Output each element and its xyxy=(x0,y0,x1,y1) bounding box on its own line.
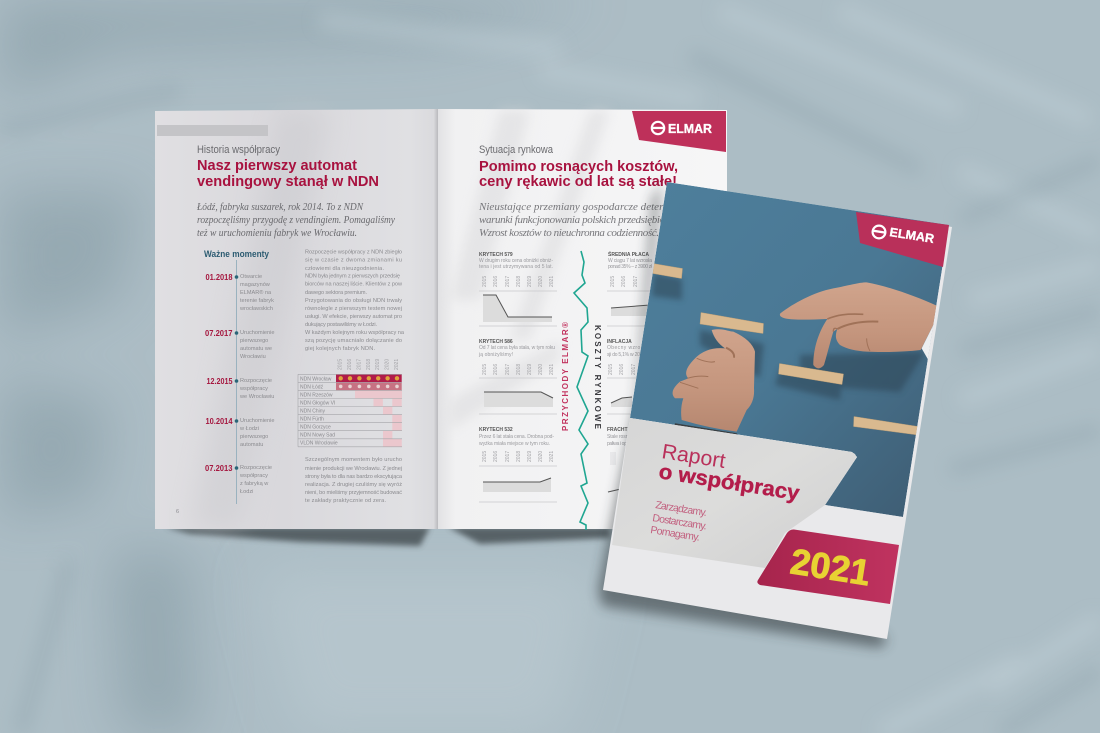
icon: lower hand xyxy=(672,329,755,442)
milestone descriptions: ELMAR® na xyxy=(240,289,272,296)
milestone descriptions: wrocławskich xyxy=(239,306,273,312)
panel: report cover xyxy=(603,182,952,639)
row labels: NDN Wrocław xyxy=(300,376,332,382)
title: o współpracy xyxy=(657,460,801,505)
closing paragraph: realizacja. Z drugiej czuliśmy się wyróż xyxy=(305,482,402,488)
chart: KRYTECH 586: 2020 xyxy=(538,364,544,375)
milestone descriptions: we Wrocławiu xyxy=(239,394,274,400)
year header: 2017 xyxy=(356,359,362,370)
milestone descriptions: Wrocławiu xyxy=(240,354,266,360)
timeline xyxy=(205,260,275,504)
vertical label: market costs: KOSZTY RYNKOWE xyxy=(593,325,602,430)
chart: average salary: ŚREDNIA PŁACA xyxy=(608,251,649,258)
chart: KRYTECH 532: Przez 6 lat stała cena. Drobna pod- xyxy=(479,434,554,440)
row lines xyxy=(298,374,402,447)
dates: 10.2014 xyxy=(206,416,233,426)
row labels: NDN Gorzyce xyxy=(300,424,331,430)
zigzag divider xyxy=(574,251,588,530)
wooden blocks xyxy=(653,264,918,435)
body text column: dawego sektora premium. xyxy=(305,290,367,296)
ELMAR logo: ELMAR xyxy=(668,122,712,136)
title xyxy=(657,440,801,505)
milestone descriptions: Uruchomienie xyxy=(240,330,275,336)
title: Raport xyxy=(660,440,727,473)
chart: freight: Stale rosną xyxy=(607,434,631,440)
milestone descriptions: Uruchomienie xyxy=(240,418,275,424)
milestone descriptions: pierwszego xyxy=(240,338,268,344)
body text column: równolegle z pierwszym testem nowej xyxy=(305,306,402,312)
tagline: Zarządzamy. xyxy=(655,499,708,519)
milestone descriptions: Otwarcie xyxy=(240,274,262,280)
chart: KRYTECH 579: 2018 xyxy=(516,276,522,287)
chart: inflation xyxy=(607,339,646,414)
row labels: NDN Rzeszów xyxy=(300,392,333,398)
milestone descriptions: automatu we xyxy=(240,346,272,352)
chart: KRYTECH 586: 2018 xyxy=(516,364,522,375)
closing paragraph xyxy=(305,457,403,504)
chart: freight xyxy=(607,427,632,492)
body text column: człowiemi dla nieuzgodnienia. xyxy=(305,266,384,272)
chart: KRYTECH 579: 2019 xyxy=(527,276,533,287)
table: factories by year xyxy=(298,359,402,447)
milestone descriptions: współpracy xyxy=(239,386,268,392)
dates: 07.2013 xyxy=(205,463,233,473)
year badge xyxy=(757,529,899,604)
heading: ceny rękawic od lat są stałe! xyxy=(479,173,677,190)
chart: inflation: 2015 xyxy=(608,364,614,375)
milestone descriptions: współpracy xyxy=(239,473,268,479)
lead paragraph: Łódź, fabryka suszarek, rok 2014. To z NDN xyxy=(196,201,364,213)
chart: KRYTECH 586: 2021 xyxy=(549,364,555,375)
heading xyxy=(479,158,678,190)
tagline xyxy=(650,499,708,544)
closing paragraph: strony była to dla nas bardzo ekscytująca xyxy=(305,474,403,480)
row labels: NDN Głogów VI xyxy=(300,400,335,406)
lead paragraph: też w uruchomieniu fabryk we Wrocławiu. xyxy=(197,227,357,239)
page light and shadow streaks xyxy=(450,110,610,430)
body text column: NDN była jednym z pierwszych przedsię xyxy=(305,274,400,280)
dates: 01.2018 xyxy=(206,272,233,282)
chart: KRYTECH 586: ją obniżyliśmy! xyxy=(478,352,513,358)
lead paragraph: Wzrost kosztów to nieuchronna codzienność. xyxy=(479,227,659,239)
year header xyxy=(338,359,400,370)
heading xyxy=(197,157,379,190)
heading: Pomimo rosnących kosztów, xyxy=(479,158,678,175)
chart: KRYTECH 532: 2019 xyxy=(527,451,533,462)
icon: pointing hand xyxy=(780,282,940,368)
dates: 07.2017 xyxy=(205,328,233,338)
year header: 2019 xyxy=(375,359,381,370)
row labels: NDN Łódź xyxy=(300,384,324,390)
body text column: W każdym kolejnym roku współpracy na xyxy=(305,330,405,336)
year: 2021 xyxy=(788,540,873,593)
chart: average salary: W ciągu 7 lat wzrosła xyxy=(608,258,652,264)
closing paragraph: Szczególnym momentem było urucho xyxy=(305,457,402,463)
lead paragraph xyxy=(478,201,694,239)
chart: KRYTECH 579: 2020 xyxy=(538,276,544,287)
chart: inflation: INFLACJA xyxy=(607,339,632,345)
lead paragraph: rozpoczęliśmy przygodę z vendingiem. Pomagaliśmy xyxy=(197,214,395,226)
chart: KRYTECH 586: 2019 xyxy=(527,364,533,375)
chart: inflation: Obecny wzrost xyxy=(607,345,646,351)
year header: 2020 xyxy=(384,359,390,370)
heat cells xyxy=(336,374,402,447)
heading: Nasz pierwszy automat xyxy=(197,157,357,174)
chart: KRYTECH 532: 2016 xyxy=(493,451,499,462)
chart: KRYTECH 579: KRYTECH 579 xyxy=(479,252,513,258)
body text column: Przygotowania do obsługi NDN trwały xyxy=(305,298,402,304)
block and hand shadows xyxy=(652,273,925,400)
chart: KRYTECH 586: Od 7 lat cena była stała, w tym roku xyxy=(479,345,555,351)
chart: KRYTECH 579: 2016 xyxy=(493,276,499,287)
body text column: się w czasie z dwoma zmianami ku xyxy=(305,258,402,264)
chart: KRYTECH 579: 2017 xyxy=(505,276,511,287)
row labels: NDN Chiny xyxy=(300,408,326,414)
milestone descriptions: automatu xyxy=(240,442,263,448)
chart: KRYTECH 579: W drugim roku cena obniżki obniż- xyxy=(479,258,553,264)
section label: Historia współpracy xyxy=(197,144,280,156)
milestone descriptions: z fabryką w xyxy=(240,481,269,487)
chart: average salary xyxy=(607,251,653,326)
chart: freight: FRACHT xyxy=(607,427,628,433)
grey tab xyxy=(157,125,268,136)
chart: average salary: ponad 35% – z 3900 zł xyxy=(608,264,653,270)
body text column: biorców na naszej liście. Klientów z pow xyxy=(305,282,403,288)
heading: vendingowy stanął w NDN xyxy=(197,173,379,190)
brand flag xyxy=(632,111,726,152)
chart: KRYTECH 586: 2017 xyxy=(505,364,511,375)
milestone descriptions: w Łodzi xyxy=(239,426,259,432)
chart: KRYTECH 579: 2021 xyxy=(549,276,555,287)
body text column: usługi. W efekcie, pierwszy automat pro xyxy=(305,314,402,320)
chart: average salary: 2017 xyxy=(633,276,639,287)
row labels: VLDN Wrocławie xyxy=(300,441,338,447)
row labels: NDN Fürth xyxy=(300,416,324,422)
panel: right page xyxy=(438,109,727,530)
chart: inflation: 2017 xyxy=(631,364,637,375)
cover drop shadow xyxy=(598,183,888,648)
title panel xyxy=(612,418,856,568)
chart: KRYTECH 579 xyxy=(479,252,557,326)
milestone descriptions: magazynów xyxy=(240,282,271,288)
body text column: giej kolejnych fabryk NDN. xyxy=(305,346,375,352)
tagline: Pomagamy. xyxy=(650,524,701,544)
brand flag xyxy=(856,212,949,267)
milestone descriptions: Łodzi xyxy=(240,489,253,495)
chart: KRYTECH 579: tena i jest utrzymywana od 5 lat. xyxy=(479,264,553,270)
chart: KRYTECH 586: 2016 xyxy=(493,364,499,375)
row labels: NDN Nowy Sad xyxy=(300,433,335,439)
panel: left page xyxy=(155,109,438,529)
chart: average salary: 2015 xyxy=(610,276,616,287)
chart: KRYTECH 532: 2017 xyxy=(505,451,511,462)
milestone descriptions: terenie fabryk xyxy=(240,298,274,304)
chart: inflation: sji do 5,1% w 2021 xyxy=(607,352,645,358)
body text column: Rozpoczęcie współpracy z NDN zbiegło xyxy=(305,250,402,256)
page shading xyxy=(190,110,330,529)
chart: KRYTECH 532: wyżka miała miejsce w tym roku. xyxy=(479,441,550,447)
closing paragraph: mienie produkcji we Wrocławiu. Z jednej xyxy=(305,466,402,472)
chart: average salary: 2016 xyxy=(621,276,627,287)
chart: KRYTECH 532: 2020 xyxy=(538,451,544,462)
lead paragraph xyxy=(196,201,395,239)
section label: Sytuacja rynkowa xyxy=(479,144,554,156)
subheading: important moments: Ważne momenty xyxy=(204,249,270,260)
vertical label: Elmar revenue: PRZYCHODY ELMAR® xyxy=(561,322,570,431)
closing paragraph: te zakłady praktycznie od zera. xyxy=(305,498,386,504)
milestone descriptions xyxy=(239,274,275,495)
chart: KRYTECH 586: KRYTECH 586 xyxy=(479,339,513,345)
milestone descriptions: Rozpoczęcie xyxy=(240,465,272,471)
open brochure shadow xyxy=(165,527,610,546)
year header: 2015 xyxy=(338,359,344,370)
chart: KRYTECH 532 xyxy=(479,427,557,502)
ELMAR logo: ELMAR xyxy=(889,225,935,246)
chart: KRYTECH 532: 2018 xyxy=(516,451,522,462)
tagline: Dostarczamy. xyxy=(652,512,708,533)
body text column: dukujący postawiliśmy w Łodzi. xyxy=(305,322,377,328)
lead paragraph: warunki funkcjonowania polskich przedsiębiorstw. xyxy=(479,214,684,226)
cover photo xyxy=(630,182,949,517)
lead paragraph: Nieustające przemiany gospodarcze determinują xyxy=(478,201,694,213)
chart: KRYTECH 579: 2015 xyxy=(482,276,488,287)
milestone descriptions: pierwszego xyxy=(240,434,268,440)
chart: KRYTECH 586: 2015 xyxy=(482,364,488,375)
body text column xyxy=(305,250,405,352)
row labels xyxy=(300,376,338,447)
chart: freight: paliwa i opłat xyxy=(607,441,632,447)
milestone descriptions: Rozpoczęcie xyxy=(240,378,272,384)
closing paragraph: nieni, bo mieliśmy przyjemność budować xyxy=(305,490,402,496)
chart: KRYTECH 532: KRYTECH 532 xyxy=(479,427,513,433)
year header: 2018 xyxy=(366,359,372,370)
page number: 6 xyxy=(176,509,179,515)
year header: 2016 xyxy=(347,359,353,370)
body text column: szą pozycję umacniało dołączanie do xyxy=(305,338,402,344)
chart: KRYTECH 586 xyxy=(478,339,557,414)
chart: inflation: 2016 xyxy=(619,364,625,375)
dates: 12.2015 xyxy=(206,376,233,386)
dates xyxy=(205,272,233,473)
chart: KRYTECH 532: 2015 xyxy=(482,451,488,462)
chart: KRYTECH 532: 2021 xyxy=(549,451,555,462)
year header: 2021 xyxy=(394,359,400,370)
